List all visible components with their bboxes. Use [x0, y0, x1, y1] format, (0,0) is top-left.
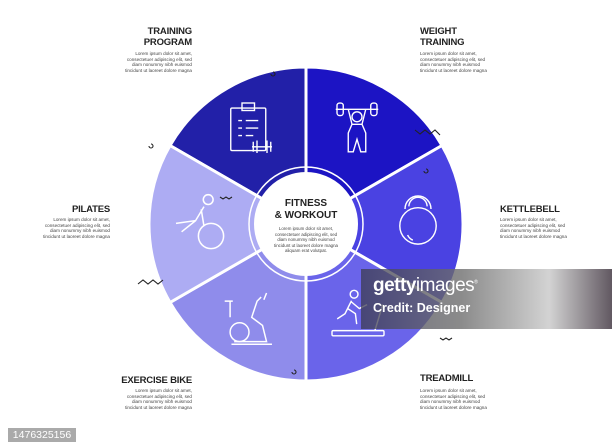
label: training program: PROGRAM — [144, 37, 192, 48]
label: pilates: PILATES — [72, 204, 110, 215]
label: pilates: tincidunt ut laoreet dolore magna — [43, 234, 110, 239]
center title and text: Lorem ipsum dolor sit amet, — [279, 226, 333, 231]
label: pilates — [43, 204, 110, 239]
icon: kettlebell — [400, 196, 436, 244]
label: kettlebell: Lorem ipsum dolor sit amet, — [500, 217, 557, 222]
watermark band — [361, 269, 612, 329]
id badge: 1476325156 — [13, 429, 71, 441]
decorations: zigzags and rings — [138, 72, 452, 374]
label: weight training: tincidunt ut laoreet dolore magna — [420, 68, 487, 73]
label: exercise bike — [121, 375, 192, 410]
label: kettlebell: consectetuer adipiscing elit, sed — [500, 223, 565, 228]
label: treadmill: Lorem ipsum dolor sit amet, — [420, 388, 477, 393]
label: exercise bike: EXERCISE BIKE — [121, 375, 192, 386]
segment: weight training — [306, 67, 442, 199]
segment: pilates — [149, 146, 263, 302]
label: weight training — [420, 26, 487, 73]
label: kettlebell — [500, 204, 567, 239]
icon: treadmill — [332, 290, 384, 336]
icon: weightlifter — [336, 103, 378, 152]
watermark band: Credit: Designer — [373, 301, 470, 315]
label: exercise bike: diam nonummy nibh euismod — [132, 399, 192, 404]
label: kettlebell: KETTLEBELL — [500, 204, 560, 215]
label: weight training: WEIGHT — [420, 26, 457, 37]
label: pilates: Lorem ipsum dolor sit amet, — [53, 217, 110, 222]
watermark band: gettyimages® — [373, 275, 477, 296]
icon: clipboard — [231, 103, 272, 153]
center title and text: & WORKOUT — [275, 210, 337, 221]
label: treadmill — [420, 373, 487, 410]
label: pilates: diam nonummy nibh euismod — [50, 228, 110, 233]
label: weight training: consectetuer adipiscing elit, sed — [420, 57, 485, 62]
label: training program: diam nonummy nibh euismod — [132, 62, 192, 67]
label: training program: Lorem ipsum dolor sit amet, — [135, 51, 192, 56]
label: exercise bike: consectetuer adipiscing elit, sed — [127, 394, 192, 399]
label: exercise bike: Lorem ipsum dolor sit amet, — [135, 388, 192, 393]
center title and text: aliquam erat volutpat. — [285, 248, 327, 253]
icon: pilates — [176, 195, 224, 249]
center title and text — [274, 198, 338, 253]
center title and text: diam nonummy nibh euismod — [277, 237, 335, 242]
label: treadmill: diam nonummy nibh euismod — [420, 399, 480, 404]
label: training program — [125, 26, 192, 73]
label: weight training: diam nonummy nibh euismod — [420, 62, 480, 67]
segment: treadmill — [306, 249, 442, 381]
label: training program: consectetuer adipiscing elit, sed — [127, 57, 192, 62]
label: weight training: TRAINING — [420, 37, 464, 48]
segment: training program — [170, 67, 306, 199]
label: treadmill: consectetuer adipiscing elit, sed — [420, 394, 485, 399]
label: exercise bike: tincidunt ut laoreet dolore magna — [125, 405, 192, 410]
center title and text: tincidunt ut laoreet dolore magna — [274, 243, 338, 248]
label: training program: tincidunt ut laoreet dolore magna — [125, 68, 192, 73]
segment: exercise bike — [170, 249, 306, 381]
label: kettlebell: tincidunt ut laoreet dolore magna — [500, 234, 567, 239]
label: kettlebell: diam nonummy nibh euismod — [500, 228, 560, 233]
center title and text: consectetuer adipiscing elit, sed — [275, 232, 337, 237]
label: training program: TRAINING — [148, 26, 192, 37]
center title and text: FITNESS — [285, 198, 327, 209]
label: treadmill: tincidunt ut laoreet dolore magna — [420, 405, 487, 410]
label: treadmill: TREADMILL — [420, 373, 473, 384]
icon: exercise bike — [225, 293, 272, 344]
label: pilates: consectetuer adipiscing elit, sed — [45, 223, 110, 228]
label: weight training: Lorem ipsum dolor sit amet, — [420, 51, 477, 56]
segment: kettlebell — [349, 146, 463, 302]
